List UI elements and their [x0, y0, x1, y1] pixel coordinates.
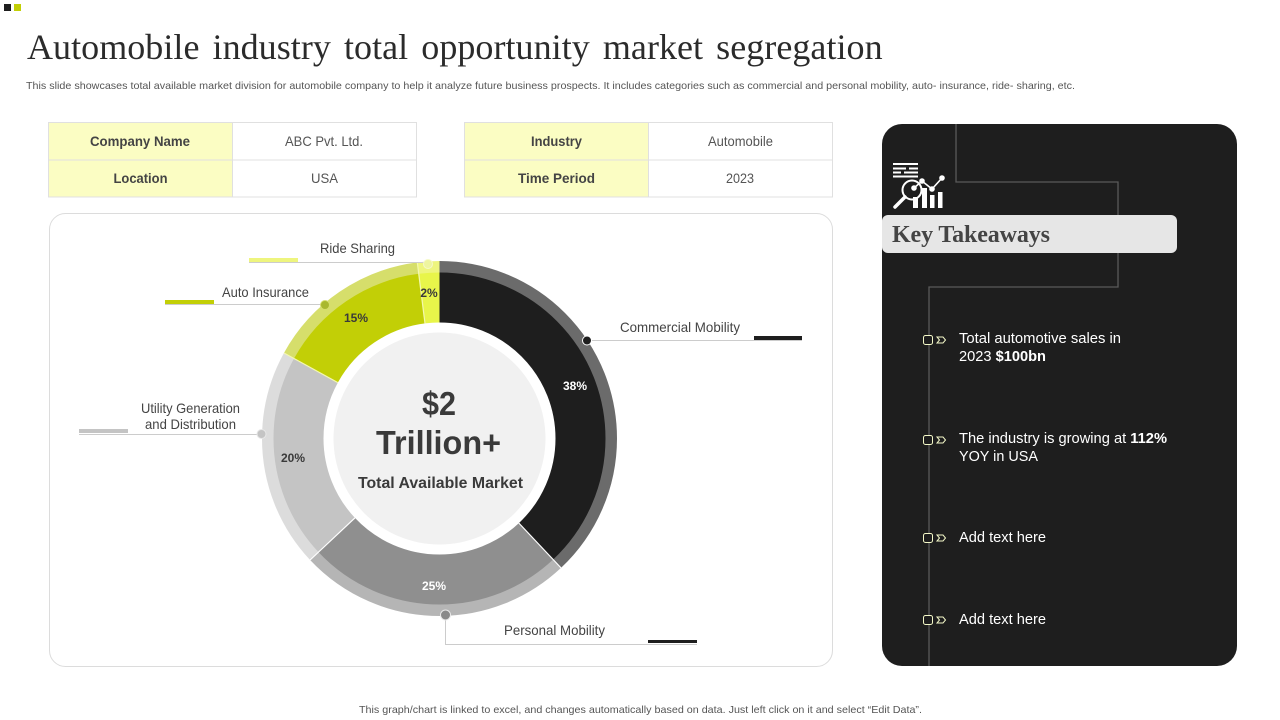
table: industry details [464, 122, 832, 197]
corner squares [4, 4, 21, 11]
table: industry details: Automobile [708, 133, 773, 149]
callout: utility generation [79, 400, 266, 438]
connector line [929, 124, 1118, 666]
heading bar [882, 215, 1177, 253]
percentage labels [281, 286, 587, 593]
heading bar: Key Takeaways [892, 222, 1050, 248]
callout: auto insurance: Auto Insurance [222, 284, 309, 300]
takeaway 2: The industry is growing at 112% [959, 430, 1167, 447]
table: industry details: 2023 [726, 170, 754, 186]
callout: ride sharing [249, 240, 432, 268]
icon: analytics [893, 164, 945, 208]
takeaway 1 [924, 330, 1121, 365]
takeaway 2 [924, 430, 1167, 465]
takeaway 3 [924, 529, 1046, 546]
table: company details: Company Name [90, 133, 190, 149]
subtitle: This slide showcases total available market division for automobile company to help it analyze future business prospects. It includes categories such as commercial and personal mobility, auto- insurance, ride- sharing, etc. [26, 80, 1075, 92]
takeaway 3: Add text here [959, 529, 1046, 546]
table: company details: USA [311, 170, 339, 186]
takeaway 1: Total automotive sales in [959, 330, 1121, 347]
footnote: This graph/chart is linked to excel, and changes automatically based on data. Just left click on it and select “Edit Data”. [359, 704, 922, 716]
title: Automobile industry total opportunity market segregation [27, 27, 883, 67]
callout: personal mobility: Personal Mobility [504, 622, 605, 638]
takeaway 1: 2023 $100bn [959, 348, 1046, 365]
callout: ride sharing: Ride Sharing [320, 240, 395, 256]
percentage labels: 15% [344, 311, 368, 325]
callout: utility generation: Utility Generation [141, 400, 240, 416]
table: industry details: Industry [531, 133, 582, 149]
table: industry details: Time Period [518, 170, 595, 186]
table: company details: ABC Pvt. Ltd. [285, 133, 363, 149]
callout: personal mobility [440, 610, 697, 644]
takeaway 4 [924, 611, 1046, 628]
panel: chart card [50, 214, 832, 666]
takeaway 4: Add text here [959, 611, 1046, 628]
callout: auto insurance [165, 284, 330, 310]
donut centre [334, 332, 546, 544]
panel: key takeaways [882, 124, 1237, 666]
table: company details: Location [114, 170, 168, 186]
table: company details [48, 122, 416, 197]
donut centre: Trillion+ [376, 424, 501, 461]
callout: commercial mobility [582, 319, 802, 345]
donut centre: $2 [422, 385, 456, 422]
donut separators [284, 262, 561, 568]
callout: utility generation: and Distribution [145, 416, 236, 432]
donut chart [268, 267, 611, 610]
callout: commercial mobility: Commercial Mobility [620, 319, 740, 335]
percentage labels: 20% [281, 451, 305, 465]
percentage labels: 38% [563, 379, 587, 393]
takeaway 2: YOY in USA [959, 448, 1038, 465]
donut centre: Total Available Market [358, 475, 524, 492]
percentage labels: 25% [422, 579, 446, 593]
percentage labels: 2% [420, 286, 438, 300]
